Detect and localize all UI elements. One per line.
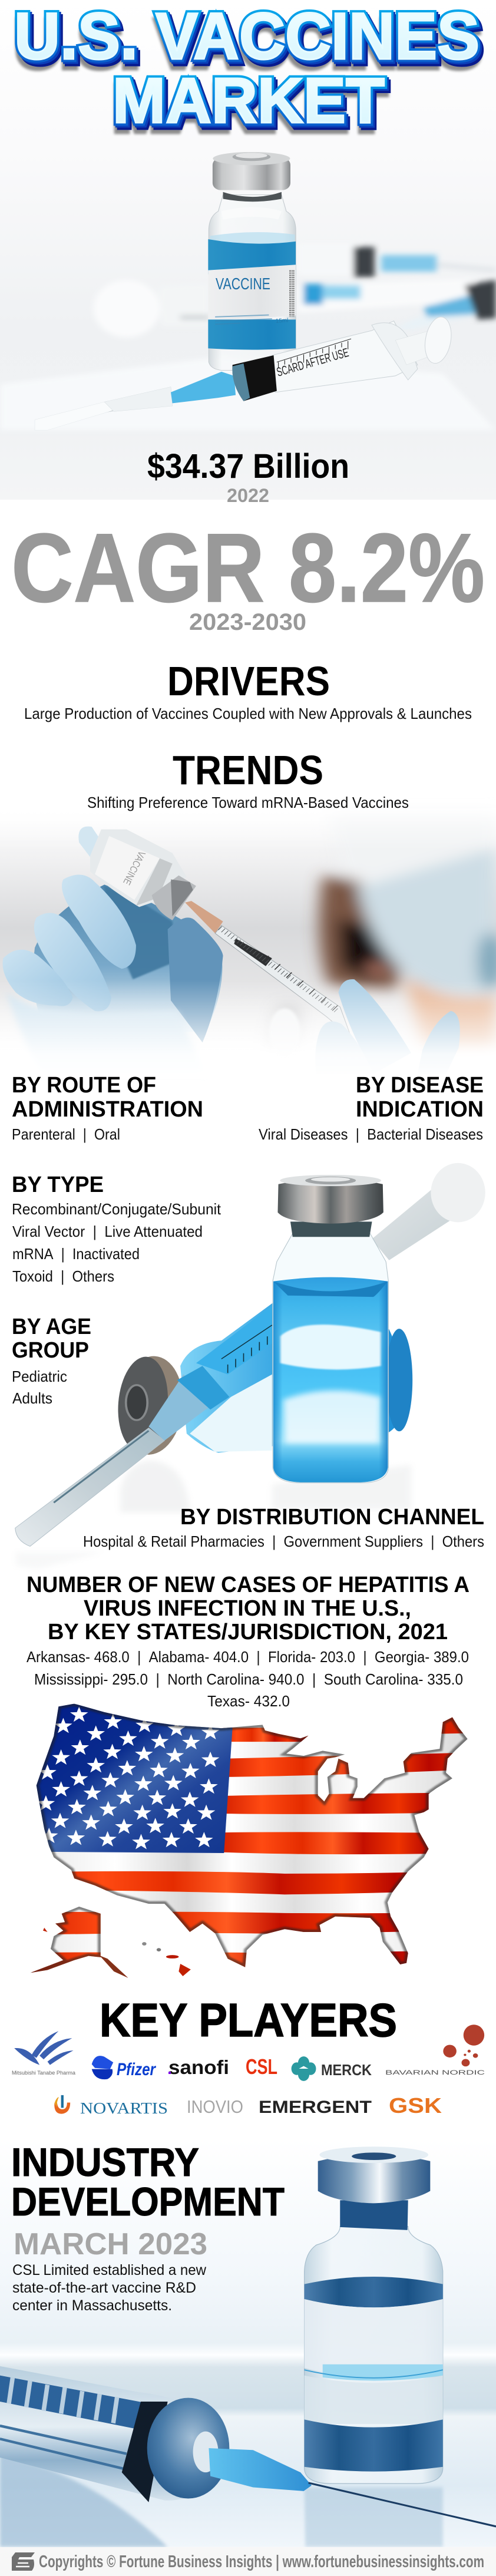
segment: by type: mRNA | Inactivated bbox=[12, 1245, 140, 1263]
trends heading: TRENDS bbox=[173, 747, 323, 793]
segment: by age group: Pediatric bbox=[12, 1368, 67, 1385]
segment: by disease indication: INDICATION bbox=[356, 1097, 484, 1122]
key player logos bbox=[12, 2025, 485, 2118]
hero photo: vaccine vial and syringes bbox=[0, 0, 496, 500]
market size value: $34.37 Billion bbox=[147, 447, 349, 486]
logo: Bavarian Nordic: BAVARIAN NORDIC bbox=[385, 2069, 485, 2076]
vial print: VACCINE bbox=[121, 849, 147, 887]
industry development heading bbox=[11, 2140, 285, 2224]
lying vial bbox=[115, 1301, 412, 1457]
front vial bbox=[273, 1175, 388, 1483]
logo: Mitsubishi Tanabe Pharma bbox=[12, 2031, 75, 2076]
Hawaii islands bbox=[43, 1928, 191, 1976]
title: U.S. VACCINES bbox=[15, 7, 481, 81]
logo: CSL: CSL bbox=[246, 2055, 277, 2079]
map: United States in flag pattern bbox=[25, 1697, 474, 1981]
segment: by route of administration: ADMINISTRATION bbox=[12, 1097, 203, 1122]
logo: sanofi: sanofi bbox=[168, 2056, 229, 2078]
reflections bbox=[16, 1461, 411, 1569]
state case figures bbox=[27, 1648, 469, 1710]
photo: vial and syringe, blue toned bbox=[0, 2139, 496, 2547]
logo: Pfizer bbox=[92, 2056, 157, 2079]
title: MARKET bbox=[113, 65, 385, 137]
development date: MARCH 2023 bbox=[14, 2227, 207, 2261]
segment: by type: Toxoid | Others bbox=[12, 1267, 114, 1285]
segment: by disease indication bbox=[259, 1073, 484, 1143]
photo: gloved hands filling syringe bbox=[0, 808, 496, 1079]
segment: by route of administration bbox=[12, 1073, 203, 1143]
logo: Novartis: NOVARTIS bbox=[80, 2099, 168, 2117]
blurred background syringes bbox=[0, 243, 496, 430]
vial in hand bbox=[90, 830, 351, 1037]
state case figures: Mississippi- 295.0 | North Carolina- 940.0 | South Carolina- 335.0 bbox=[34, 1670, 463, 1688]
segment: by route of administration: BY ROUTE OF bbox=[12, 1073, 156, 1098]
segment: by age group: BY AGE bbox=[12, 1315, 91, 1339]
development description bbox=[12, 2262, 207, 2314]
title bbox=[14, 0, 483, 144]
industry development heading: DEVELOPMENT bbox=[11, 2179, 285, 2224]
segment: by age group bbox=[12, 1315, 91, 1407]
segment: by type bbox=[12, 1173, 221, 1285]
vial bbox=[35, 152, 454, 430]
plunger bbox=[372, 1163, 485, 1260]
logo: Mitsubishi Tanabe Pharma: Mitsubishi Tanabe Pharma bbox=[12, 2070, 75, 2076]
state case figures: Texas- 432.0 bbox=[207, 1692, 290, 1710]
hepatitis heading: BY KEY STATES/JURISDICTION, 2021 bbox=[48, 1620, 448, 1644]
segment: by disease indication: BY DISEASE bbox=[356, 1073, 484, 1098]
syringe bbox=[185, 901, 223, 933]
drivers text: Large Production of Vaccines Coupled with New Approvals & Launches bbox=[24, 705, 472, 722]
segment: by type: BY TYPE bbox=[12, 1173, 104, 1197]
vial label text: VACCINE bbox=[216, 275, 270, 293]
photo: blue vials and syringe bbox=[15, 1163, 485, 1569]
left gloved hand bbox=[2, 827, 223, 1074]
logo: Novartis bbox=[54, 2095, 168, 2117]
logo: Emergent: EMERGENT bbox=[259, 2098, 372, 2117]
development description: state-of-the-art vaccine R&D bbox=[12, 2280, 196, 2296]
segment: by type: Recombinant/Conjugate/Subunit bbox=[12, 1200, 221, 1218]
icon: Fortune Business Insights logo bbox=[12, 2552, 35, 2571]
title: MARKET bbox=[113, 65, 385, 137]
right gloved fingers bbox=[269, 979, 460, 1074]
syringe bbox=[15, 1305, 272, 1546]
logo: Bavarian Nordic bbox=[385, 2025, 485, 2076]
segment: by type: Viral Vector | Live Attenuated bbox=[12, 1223, 203, 1240]
segment: by route of administration: Parenteral | Oral bbox=[12, 1125, 120, 1143]
title: MARKET bbox=[116, 69, 388, 141]
hepatitis heading: VIRUS INFECTION IN THE U.S., bbox=[84, 1596, 411, 1621]
segment: by age group: GROUP bbox=[12, 1338, 89, 1363]
key players heading: KEY PLAYERS bbox=[100, 1994, 397, 2046]
blurred face and mask bbox=[269, 814, 496, 1048]
syringe print: SCARD AFTER USE bbox=[275, 346, 350, 379]
CAGR period: 2023-2030 bbox=[189, 609, 306, 635]
development description: center in Massachusetts. bbox=[12, 2297, 172, 2314]
syringe bbox=[0, 2366, 496, 2547]
segment: by age group: Adults bbox=[12, 1389, 52, 1407]
drivers heading: DRIVERS bbox=[167, 658, 330, 704]
state case figures: Arkansas- 468.0 | Alabama- 404.0 | Florida- 203.0 | Georgia- 389.0 bbox=[27, 1648, 469, 1666]
development description: CSL Limited established a new bbox=[12, 2262, 207, 2278]
logo: Merck: MERCK bbox=[321, 2061, 372, 2079]
title: MARKET bbox=[114, 67, 386, 138]
logo: Merck bbox=[292, 2056, 372, 2081]
logo: GSK: GSK bbox=[389, 2093, 442, 2118]
footer bbox=[0, 2547, 496, 2576]
title: U.S. VACCINES bbox=[18, 4, 483, 77]
segment: by distribution channel: BY DISTRIBUTION CHANNEL bbox=[180, 1505, 484, 1530]
title: U.S. VACCINES bbox=[14, 0, 480, 73]
title: U.S. VACCINES bbox=[16, 1, 481, 75]
hepatitis heading bbox=[27, 1573, 469, 1644]
vial bbox=[305, 2146, 443, 2547]
title: MARKET bbox=[114, 72, 386, 144]
front syringe graphic bbox=[35, 316, 454, 430]
vial volume: 15ml bbox=[275, 318, 289, 325]
segment: by distribution channel bbox=[83, 1505, 484, 1550]
hepatitis heading: NUMBER OF NEW CASES OF HEPATITIS A bbox=[27, 1573, 469, 1597]
trends text: Shifting Preference Toward mRNA-Based Vaccines bbox=[87, 794, 409, 811]
industry development heading: INDUSTRY bbox=[11, 2140, 199, 2185]
market size year: 2022 bbox=[227, 485, 269, 506]
stars bbox=[37, 1706, 219, 1849]
logo: Inovio: INOVIO bbox=[187, 2096, 243, 2117]
title: U.S. VACCINES bbox=[14, 0, 480, 73]
logo: Pfizer: Pfizer bbox=[117, 2060, 157, 2079]
